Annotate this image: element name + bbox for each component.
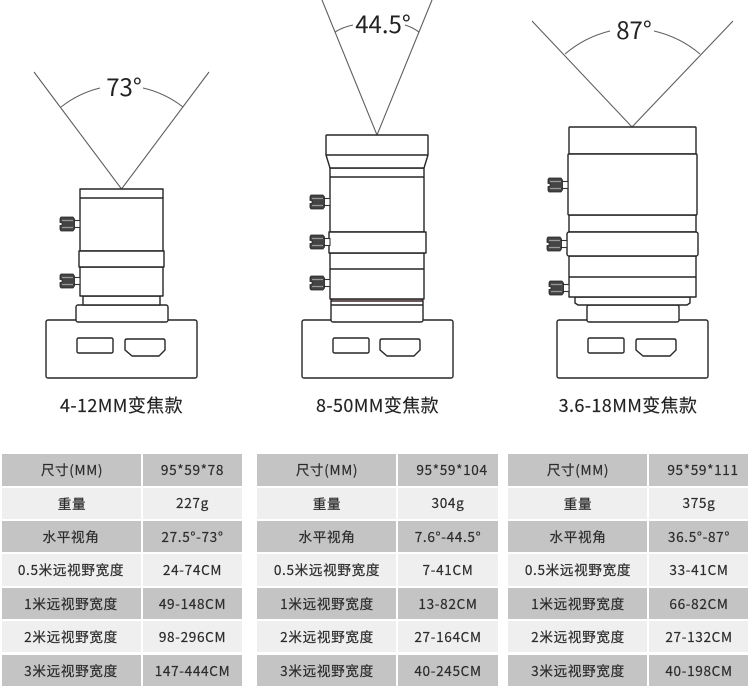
table: 3.6-18MM specifications: 375g	[683, 492, 715, 512]
table: 8-50MM specifications: 0.5米远视野宽度	[274, 559, 380, 579]
table: 8-50MM specifications: 2米远视野宽度	[280, 626, 374, 646]
caption: 4-12MM: 4-12MM变焦款	[60, 392, 183, 418]
table: 4-12MM specifications: 49-148CM	[159, 593, 226, 613]
angle label: 73 degrees: 73°	[106, 68, 142, 103]
table: 4-12MM specifications: 147-444CM	[155, 660, 230, 680]
table: 3.6-18MM specifications: 3米远视野宽度	[531, 660, 625, 680]
table: 8-50MM specifications: 95*59*104	[416, 459, 488, 479]
field of view lines, 87 degrees	[532, 21, 733, 127]
table: 4-12MM specifications: 227g	[176, 492, 209, 512]
table: 4-12MM specifications: 重量	[58, 493, 86, 513]
table: 8-50MM specifications: 304g	[432, 492, 464, 512]
table: 4-12MM specifications: 水平视角	[43, 526, 99, 546]
table: 4-12MM specifications: 24-74CM	[163, 559, 222, 579]
table: 4-12MM specifications	[2, 454, 242, 686]
panel: 4-12MM lens diagram	[34, 68, 209, 378]
icon: adjustment screw upper	[60, 217, 80, 231]
table: 3.6-18MM specifications: 1米远视野宽度	[531, 593, 625, 613]
table: 8-50MM specifications: 40-245CM	[414, 660, 482, 680]
icon: adjustment screw middle	[547, 237, 567, 251]
camera box	[557, 320, 708, 378]
table: 3.6-18MM specifications: 重量	[564, 493, 592, 513]
table: 4-12MM specifications: 1米远视野宽度	[24, 593, 118, 613]
table: 4-12MM specifications: 98-296CM	[159, 626, 226, 646]
table: 3.6-18MM specifications	[508, 454, 748, 686]
icon: adjustment screw lower	[310, 276, 330, 290]
panel: 8-50MM lens diagram	[302, 0, 453, 378]
caption: 8-50MM: 8-50MM变焦款	[316, 392, 439, 418]
field of view lines, 73 degrees	[34, 72, 209, 189]
table: 8-50MM specifications: 7-41CM	[423, 559, 473, 579]
panel: 3.6-18MM lens diagram	[532, 11, 733, 378]
table: 3.6-18MM specifications: 水平视角	[550, 526, 606, 546]
table: 8-50MM specifications: 7.6°-44.5°	[415, 526, 481, 546]
table: 4-12MM specifications: 27.5°-73°	[161, 526, 224, 546]
table: 8-50MM specifications: 水平视角	[299, 526, 355, 546]
field of view lines, 44.5 degrees	[322, 0, 432, 135]
table: 4-12MM specifications: 0.5米远视野宽度	[18, 559, 124, 579]
table: 4-12MM specifications: 3米远视野宽度	[24, 660, 118, 680]
icon: adjustment screw lower	[549, 281, 569, 295]
table: 3.6-18MM specifications: 95*59*111	[667, 459, 739, 479]
table: 8-50MM specifications: 13-82CM	[418, 593, 478, 613]
table: 8-50MM specifications: 重量	[313, 493, 341, 513]
table: 8-50MM specifications: 3米远视野宽度	[280, 660, 374, 680]
table: 4-12MM specifications: 2米远视野宽度	[24, 626, 118, 646]
table: 8-50MM specifications	[257, 454, 498, 686]
table: 3.6-18MM specifications: 66-82CM	[669, 593, 729, 613]
table: 8-50MM specifications: 27-164CM	[414, 626, 482, 646]
table: 3.6-18MM specifications: 40-198CM	[665, 660, 733, 680]
angle label: 44.5 degrees: 44.5°	[355, 5, 411, 40]
table: 4-12MM specifications: 尺寸(MM)	[41, 459, 103, 479]
table: 3.6-18MM specifications: 2米远视野宽度	[531, 626, 625, 646]
icon: adjustment screw lower	[60, 274, 80, 288]
icon: adjustment screw upper	[310, 195, 330, 209]
lens body	[567, 127, 698, 322]
camera box	[302, 320, 453, 378]
icon: adjustment screw middle	[310, 235, 330, 249]
caption: 3.6-18MM: 3.6-18MM变焦款	[559, 392, 697, 418]
camera box	[46, 320, 197, 378]
table: 3.6-18MM specifications: 27-132CM	[665, 626, 733, 646]
table: 8-50MM specifications: 1米远视野宽度	[280, 593, 374, 613]
angle label: 87 degrees: 87°	[616, 11, 652, 46]
icon: adjustment screw upper	[548, 178, 568, 192]
lens body	[76, 189, 168, 322]
table: 3.6-18MM specifications: 33-41CM	[669, 559, 729, 579]
table: 8-50MM specifications: 尺寸(MM)	[296, 459, 358, 479]
table: 3.6-18MM specifications: 尺寸(MM)	[547, 459, 609, 479]
lens body	[326, 135, 428, 322]
table: 3.6-18MM specifications: 36.5°-87°	[668, 526, 730, 546]
table: 3.6-18MM specifications: 0.5米远视野宽度	[525, 559, 631, 579]
table: 4-12MM specifications: 95*59*78	[161, 459, 224, 479]
